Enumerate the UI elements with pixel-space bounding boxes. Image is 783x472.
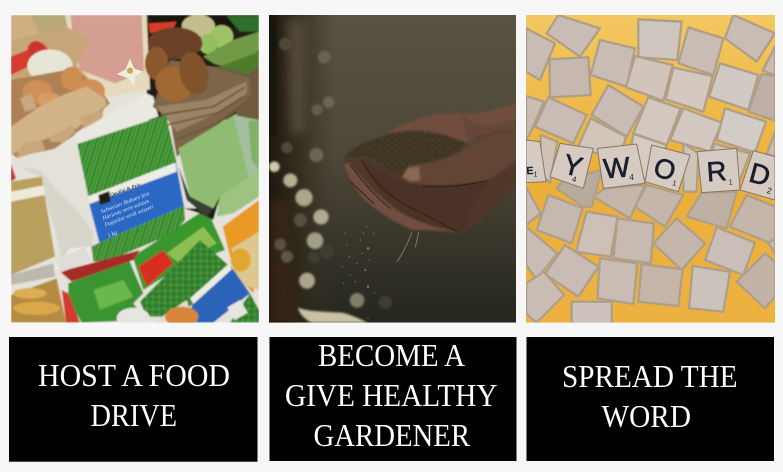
tile letters: 2 (766, 185, 773, 196)
panel: hands holding soil photo (269, 15, 516, 323)
panel: host a food drive caption: HOST A FOOD (38, 357, 230, 393)
roots (397, 232, 419, 262)
tile letters: 1 (729, 178, 733, 187)
icon: edelweiss on ham pack (117, 58, 143, 86)
hand creases (350, 160, 487, 232)
panel: spread the word caption: SPREAD THE (562, 358, 738, 394)
tile letters: 1 (671, 178, 678, 188)
label: bean bag text: 1 kg (107, 230, 118, 239)
tile letters: Y (560, 148, 586, 183)
soil (345, 131, 466, 177)
tile letters: 4 (629, 173, 634, 182)
tile letters: R (706, 155, 728, 187)
panel: become a give healthy gardener caption: BECOME A (318, 337, 465, 373)
label: bean bag text: Qualité & Prix (109, 182, 142, 199)
panel: become a give healthy gardener caption: GIVE HEALTHY (285, 377, 498, 413)
label: bean bag text: Haricots verts suisses (101, 198, 151, 222)
label: bean bag text: Schweizer Bohnen fein (100, 190, 151, 215)
panel: become a give healthy gardener caption (270, 337, 516, 461)
tile letters: 1 (533, 170, 537, 179)
tile letters: W (602, 151, 632, 184)
tile letters: E (526, 166, 534, 177)
label: bean bag text (100, 182, 155, 239)
panel: become a give healthy gardener caption: GARDENER (314, 417, 471, 453)
tile letters: D (746, 157, 774, 192)
tile letters: O (651, 151, 679, 187)
hands (343, 103, 516, 233)
panel: spread the word caption (526, 337, 774, 461)
label: bean bag text: Fagiolini verdi svizzeri (103, 204, 155, 229)
wooden tiles (526, 15, 775, 327)
letter tiles (526, 140, 775, 200)
falling soil particles (341, 226, 375, 319)
panel: scrabble tiles photo (526, 15, 775, 323)
panel: spread the word caption: WORD (602, 398, 691, 434)
panel: food photo (11, 15, 259, 323)
bokeh lights (269, 38, 392, 323)
tile letters: 4 (571, 174, 578, 184)
panel: host a food drive caption (9, 337, 258, 462)
tile letters (526, 154, 772, 194)
panel: host a food drive caption: DRIVE (90, 397, 177, 433)
